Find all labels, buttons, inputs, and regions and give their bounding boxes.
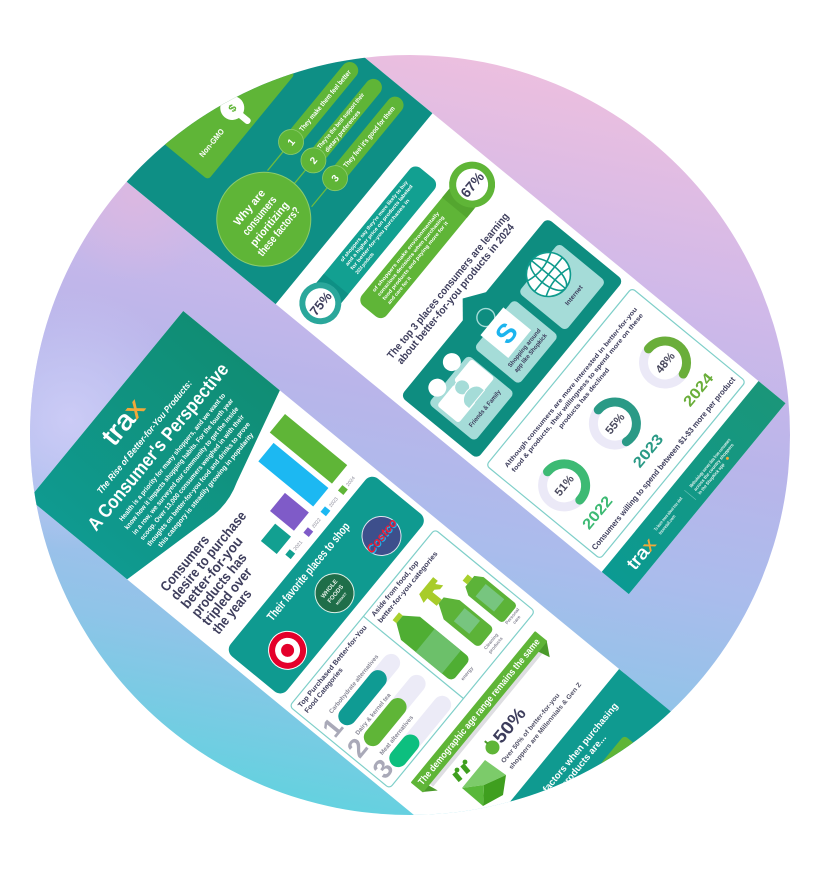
card: shopping around: Shopping around [507, 327, 543, 369]
legend: 2022 [311, 517, 323, 530]
intro paragraph: this category is steadily growing in popularity [157, 432, 255, 549]
footer: trax bar: across the country shoppers [693, 442, 735, 492]
pill: reason 1: 1 [286, 137, 298, 148]
donut: 2022 [538, 459, 613, 530]
text: food categories title: Food Categories [304, 667, 345, 715]
logo: Costco: Costco [363, 516, 400, 556]
circle: why are consumers prioritizing: consumers [240, 194, 279, 238]
panel: bottom teal section [498, 669, 682, 869]
bar: carbohydrate alternatives: Carbohydrate alternatives [328, 653, 381, 715]
text: non-food categories title: Aside from food, top [371, 560, 421, 618]
text: spending caption: Consumers willing to spend between $1-$3 more per product [590, 375, 737, 552]
panel: favorite places to shop [225, 473, 427, 697]
legend [285, 474, 357, 559]
pill: reason 3: 3 [330, 173, 342, 184]
intro paragraph: scoop. Over 13,000 consumers weighed in with their [139, 414, 246, 542]
icon: globe [526, 252, 572, 298]
pill: reason 3 [322, 96, 404, 192]
legend: 2024 [345, 475, 357, 488]
panel: bottom teal section: The main factors when purchasing [513, 701, 621, 829]
panel: lower left page [29, 311, 624, 861]
circle: why are consumers prioritizing [216, 172, 312, 267]
heading: consumers desire [161, 512, 252, 634]
footer: trax bar: Methodology survey data from consumers [688, 437, 732, 488]
card: shopping around: app like Shopkick [513, 332, 549, 374]
donut: 2022: 2022 [579, 493, 616, 533]
panel: Non-GMO green card [165, 74, 294, 178]
heading: consumers desire: better-for-you [177, 533, 246, 611]
stat: 75 percent teal pill: of shoppers say they're more likely to buy [339, 180, 410, 263]
stat: 75 percent teal pill: for better-for-you purchases in [350, 198, 411, 271]
intro paragraph: Health is a priority for many shoppers, and we want to [118, 392, 227, 523]
bar: carbohydrate alternatives: 1 [316, 712, 349, 743]
stat: 75 percent teal pill [299, 166, 436, 324]
heading: consumers desire: desire to purchase [167, 508, 249, 603]
card: shopping around [476, 301, 557, 383]
text: food categories title: Top Purchased Better-for-You [297, 624, 369, 709]
bar: meat alternatives: Meat alternatives [379, 714, 415, 757]
icon: cleaning spray bottle: Cleaning [483, 632, 499, 650]
intro paragraph: know how it impacts shopping habits. For the fourth year [124, 397, 235, 531]
donut: 2023: 2023 [630, 431, 667, 471]
card: friends and family [428, 353, 512, 440]
intro paragraph: thoughts on better-for-you food and drinks to prove [146, 421, 252, 548]
bar: dairy and kernel tea: Dairy & kernel tea [354, 692, 393, 737]
circle: why are consumers prioritizing: prioritizing [248, 200, 292, 249]
panel: favorite places to shop: Their favorite places to shop [264, 520, 353, 624]
bar: dairy and kernel tea: 2 [341, 733, 374, 763]
stat: 67 percent green pill: 67% [457, 168, 488, 201]
logo: trax: trax [96, 393, 151, 451]
text: spending intro: Although consumers are more interested in better-for-you [503, 306, 639, 469]
icon: apple [480, 736, 502, 757]
donut: 2024: 48% [654, 350, 678, 376]
heading: top 3 places: The top 3 places consumers are learning [385, 211, 512, 361]
pill: reason 1 [278, 62, 358, 155]
icon: cleaning spray bottle [417, 577, 506, 657]
donut: 2022: 51% [553, 473, 577, 499]
card: internet [520, 245, 604, 329]
subtitle: The Rise of Better-for-You Products: [95, 378, 194, 496]
logo: Whole Foods [314, 573, 354, 614]
pill: reason 2: dietary preferences [324, 109, 362, 154]
legend: 2021 [292, 539, 304, 552]
panel: upper right page [126, 58, 786, 594]
stat: 75 percent teal pill: and a higher price on products labeled [345, 184, 415, 267]
pill: reason 3: They feel it's good for them [343, 105, 397, 169]
panel: spending donuts box [486, 288, 746, 559]
stat: 50 percent: 50% [489, 703, 530, 747]
logo: Whole Foods: MARKET [335, 591, 348, 606]
footer: trax bar: trax [623, 534, 660, 573]
panel: bottom teal section: better-for-you products are... [518, 733, 609, 840]
footer: trax bar: To learn more about trax visit [653, 496, 684, 532]
bar: carbohydrate alternatives [316, 644, 405, 743]
intro paragraph: in a row, we surveyed our community to get the inside [132, 406, 241, 536]
heading: consumers desire: products has [188, 549, 250, 620]
stat: 67 percent green pill: of shoppers make environmentally [372, 211, 441, 293]
donut: 2023 [589, 398, 662, 468]
bar: meat alternatives: 3 [367, 754, 399, 784]
icon: personal care bottle: care [512, 614, 522, 625]
connector lines [268, 150, 329, 207]
card: friends and family: Friends & Family [468, 389, 503, 429]
text: non-food categories title: better-for-you categories [377, 551, 440, 625]
footer: trax bar [602, 381, 786, 594]
panel: top 3 places teal card [402, 220, 622, 457]
logo: Whole Foods: WHOLE [320, 579, 339, 600]
stat: 67 percent green pill: and care for it [387, 276, 413, 306]
panel: Non-GMO green card: $ [226, 102, 240, 115]
logo: Whole Foods: FOODS [327, 584, 345, 605]
stat: 75 percent teal pill: 2024 products [355, 252, 376, 276]
panel: Non-GMO green card: Non-GMO [198, 127, 226, 159]
card: shopping around: S [489, 317, 524, 350]
pill: reason 2 [300, 78, 382, 174]
stat: 50 percent: Over 50% of better-for-you [500, 692, 561, 765]
text: spending intro: products has declined [558, 367, 611, 430]
panel: why prioritizing teal section [126, 58, 432, 304]
legend: 2023 [328, 496, 340, 509]
heading: consumers desire: the years [209, 586, 255, 637]
footer: trax bar: in the Shopkick app [697, 462, 726, 495]
icon: personal care bottle [458, 568, 526, 631]
stat: 67 percent green pill: food products and paying more for it [382, 220, 450, 302]
bar: dairy and kernel tea [341, 664, 430, 763]
pill: reason 2: They're the best support their [316, 91, 366, 150]
heading: consumers desire: Consumers [157, 532, 212, 594]
logo: Costco: Costco [364, 517, 401, 557]
stat: 67 percent green pill: conscious decisions when purchasing [377, 215, 446, 298]
icon: energy bottle [386, 605, 479, 688]
heading: consumers desire: tripled over [198, 564, 255, 628]
bar chart: yearly growth [258, 414, 355, 560]
circle: why are consumers prioritizing: these factors? [256, 205, 303, 259]
title: A Consumer's Perspective [84, 360, 233, 535]
footer: trax bar: traxretail.com [658, 514, 677, 536]
stat: 50 percent: shoppers are Millennials & Gen Z [508, 682, 583, 771]
card: internet: Internet [564, 284, 585, 307]
ribbon: demographic age range: The demographic age range remains the same [416, 637, 543, 788]
stat: 75 percent teal pill: 75% [307, 288, 335, 318]
icon: green box with shoppers [452, 760, 506, 806]
stat: 67 percent green pill [360, 162, 495, 318]
donut: 2023: 55% [604, 411, 628, 437]
heading: top 3 places: about better-for-you products in 2024 [395, 222, 517, 367]
text: spending intro: food & products, their willingness to spend more on these [511, 312, 645, 474]
panel: header [34, 311, 280, 580]
circle: why are consumers prioritizing: Why are [232, 187, 268, 228]
logo: Target [268, 630, 308, 670]
icon: personal care bottle: Personal [504, 607, 520, 625]
pill: reason 1: They make them feel better [299, 69, 353, 133]
icon: cleaning spray bottle: products [487, 636, 504, 654]
pill: reason 2: 2 [308, 155, 320, 167]
donut: 2024: 2024 [680, 369, 718, 410]
stat: 50 percent [480, 659, 583, 773]
donut: 2024 [639, 336, 713, 408]
panel: categories box [290, 529, 535, 788]
icon: energy bottle: energy [460, 665, 475, 682]
bar: meat alternatives [367, 685, 456, 784]
